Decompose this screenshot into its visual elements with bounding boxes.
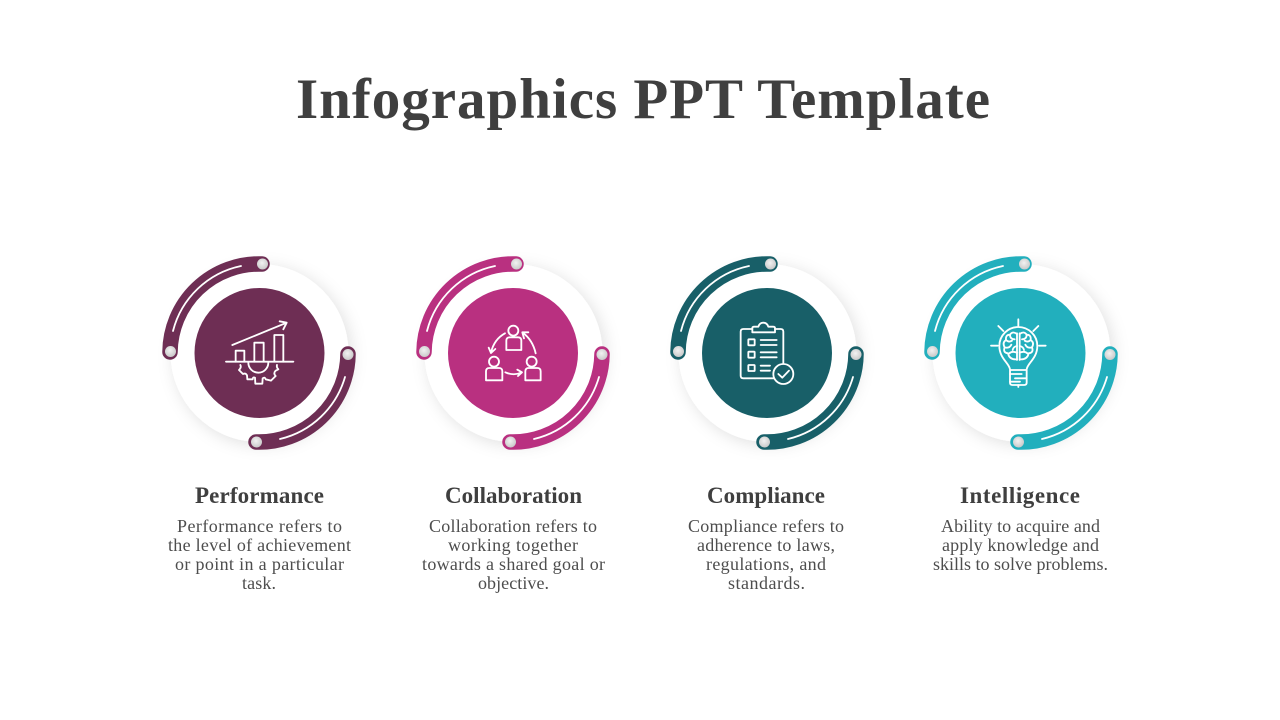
heading: intelligence: Intelligence [960,483,1080,508]
arcs: compliance [673,258,862,448]
ring: intelligence [932,264,1110,442]
text: performance: Performance refers to [177,516,342,536]
heading: compliance: Compliance [707,483,825,508]
panel: performance [165,258,354,593]
arcs: intelligence [927,258,1116,448]
text: performance [168,516,351,593]
disc: compliance [702,288,832,418]
text: compliance: adherence to laws, [697,535,835,555]
panel: collaboration [419,258,608,593]
panel: compliance [673,258,862,593]
text: compliance: standards. [728,573,805,593]
text: collaboration: Collaboration refers to [429,516,597,536]
panel: intelligence [927,258,1116,574]
icon: brain bulb [991,319,1046,387]
icon: chart and gear [226,321,293,384]
title: Infographics PPT Template [296,68,990,131]
text: compliance: Compliance refers to [688,516,844,536]
text: compliance: regulations, and [706,554,826,574]
text: intelligence [933,516,1108,574]
text: collaboration [422,516,605,593]
icon: checklist [741,323,793,384]
arcs: performance [165,258,354,448]
text: intelligence: Ability to acquire and [941,516,1100,536]
heading: performance: Performance [195,483,324,508]
ring: performance [170,264,348,442]
text: collaboration: towards a shared goal or [422,554,605,574]
disc: intelligence [956,288,1086,418]
arcs: collaboration [419,258,608,448]
ring: compliance [678,264,856,442]
text: intelligence: skills to solve problems. [933,554,1108,574]
icon: team cycle [486,326,541,380]
ring: collaboration [424,264,602,442]
text: performance: or point in a particular [175,554,344,574]
disc: collaboration [448,288,578,418]
text: performance: the level of achievement [168,535,351,555]
text: intelligence: apply knowledge and [942,535,1099,555]
heading: collaboration: Collaboration [445,483,582,508]
text: performance: task. [242,573,276,593]
text: compliance [688,516,844,593]
text: collaboration: objective. [478,573,549,593]
text: collaboration: working together [448,535,578,555]
disc: performance [194,288,324,418]
